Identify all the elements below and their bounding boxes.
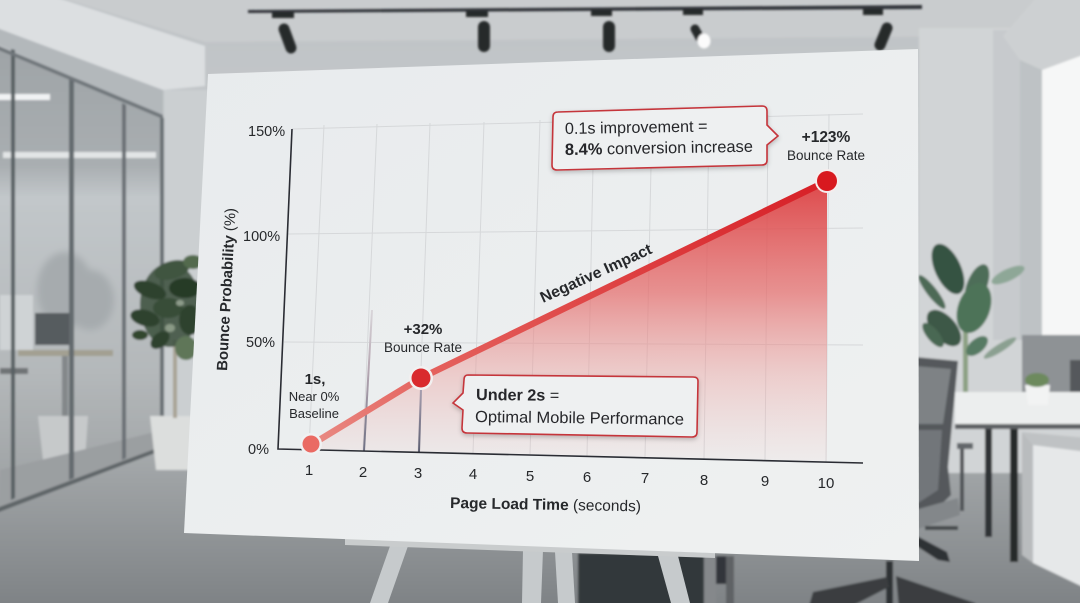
y axis labels: 0% bbox=[248, 442, 269, 458]
grid lines bbox=[284, 114, 863, 462]
x axis labels: 2 bbox=[359, 464, 367, 481]
darker grid markers at 2s and 3s bbox=[364, 310, 421, 452]
annotation: +32%: Bounce Rate bbox=[384, 340, 462, 355]
callout: under 2s bbox=[453, 375, 698, 437]
callout: conversion: 0.1s improvement = bbox=[565, 118, 708, 138]
x axis title: Page Load Time (seconds) bbox=[450, 495, 641, 515]
x axis labels: 10 bbox=[818, 475, 834, 492]
data point 3s bbox=[409, 366, 433, 390]
presentation board bbox=[184, 49, 919, 561]
annotation: +123% bbox=[787, 129, 865, 163]
y axis labels bbox=[243, 124, 285, 458]
annotation: +32% bbox=[384, 321, 462, 355]
track lighting bbox=[248, 5, 922, 48]
axes bbox=[278, 129, 863, 463]
easel ledge bbox=[345, 538, 715, 558]
x axis labels: 1 bbox=[305, 462, 313, 479]
callout: conversion: 8.4% conversion increase bbox=[565, 138, 753, 159]
y axis labels: 150% bbox=[248, 124, 285, 140]
annotation: +32%: +32% bbox=[404, 321, 442, 338]
y axis labels: 50% bbox=[246, 335, 275, 351]
annotation: 1s baseline: Near 0% bbox=[289, 389, 340, 404]
easel legs bbox=[370, 546, 690, 603]
callout: under 2s: Under 2s = bbox=[476, 386, 559, 405]
x axis labels: 7 bbox=[641, 470, 649, 487]
y axis title: Bounce Probability (%) bbox=[214, 208, 240, 371]
x axis labels bbox=[305, 462, 834, 492]
annotation: 1s baseline: Baseline bbox=[289, 406, 339, 421]
x axis labels: 9 bbox=[761, 473, 769, 490]
callout: under 2s: Optimal Mobile Performance bbox=[475, 408, 684, 429]
easel bbox=[345, 538, 715, 603]
annotation: 1s baseline bbox=[289, 371, 340, 421]
x axis labels: 4 bbox=[469, 466, 477, 483]
x axis labels: 6 bbox=[583, 469, 591, 486]
negative impact label: Negative Impact bbox=[538, 241, 655, 307]
x axis labels: 3 bbox=[414, 465, 422, 482]
chart bbox=[214, 106, 865, 515]
y axis labels: 100% bbox=[243, 229, 280, 245]
trend line bbox=[300, 169, 839, 455]
data point 1s bbox=[300, 433, 322, 455]
red area under curve bbox=[311, 181, 827, 461]
annotation: +123%: +123% bbox=[802, 129, 851, 146]
x axis labels: 8 bbox=[700, 472, 708, 489]
x axis labels: 5 bbox=[526, 468, 534, 485]
data point 10s bbox=[815, 169, 839, 193]
annotation: +123%: Bounce Rate bbox=[787, 148, 865, 163]
annotation: 1s baseline: 1s, bbox=[305, 371, 325, 388]
callout: conversion bbox=[552, 106, 778, 170]
